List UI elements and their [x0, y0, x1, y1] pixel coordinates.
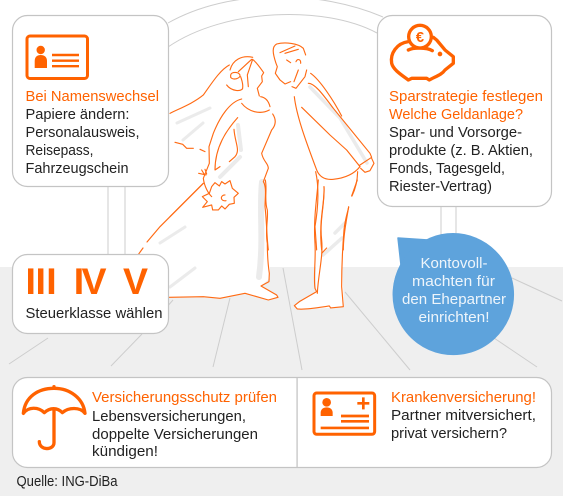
text block: Fonds, Tagesgeld,: [389, 161, 505, 177]
text block: Fahrzeugschein: [26, 161, 128, 177]
bouquet: [202, 181, 238, 210]
text block: Partner mitversichert,: [391, 408, 536, 424]
dress and shoes lower outline: [138, 180, 357, 309]
roman numerals: IIIIVV: [26, 260, 148, 302]
text block: Riester-Vertrag): [389, 179, 492, 195]
label: Steuerklasse wählen: [26, 306, 162, 322]
groom outline: [273, 43, 374, 250]
icon: umbrella: [23, 387, 85, 449]
background room lines: [9, 0, 562, 370]
text block: doppelte Versicherungen: [92, 427, 258, 443]
text block: Spar- und Vorsorge-: [389, 125, 522, 141]
text block: Reisepass,: [26, 143, 94, 159]
heading: Sparstrategie festlegen: [389, 89, 543, 105]
text block: [26, 107, 140, 177]
panel: bottom insurance: [12, 378, 552, 468]
callout: Kontovollmachten: [393, 233, 513, 354]
text block: Lebensversicherungen,: [92, 409, 246, 425]
white silhouette of dress and suit: [160, 262, 344, 309]
panel: Steuerklasse: [12, 254, 168, 334]
text block: kündigen!: [92, 444, 158, 460]
heading: Bei Namenswechsel: [26, 89, 159, 105]
text block: [391, 408, 536, 442]
icon: ID card: [27, 36, 88, 78]
heading: Welche Geldanlage?: [389, 107, 523, 123]
text block: Personalausweis,: [26, 125, 140, 141]
heading: [389, 89, 543, 123]
background floor: [0, 267, 563, 496]
text block: Papiere ändern:: [26, 107, 130, 123]
callout: Kontovollmachten: den Ehepartner: [402, 292, 506, 308]
soft shadows: [160, 87, 367, 287]
text block: produkte (z. B. Aktien,: [389, 143, 533, 159]
callout: Kontovollmachten: machten für: [412, 274, 495, 290]
bride upper outline: [170, 57, 275, 250]
text block: [389, 125, 533, 195]
panel: Namenswechsel: [12, 16, 168, 186]
heading: Versicherungsschutz prüfen: [92, 390, 277, 406]
callout: Kontovollmachten: einrichten!: [418, 310, 490, 326]
source: Quelle: ING-DiBa: [16, 474, 118, 490]
panel: Sparstrategie: [378, 16, 552, 206]
heading: Krankenversicherung!: [391, 390, 536, 406]
icon: piggy bank with euro coin: [391, 25, 453, 80]
text block: privat versichern?: [391, 426, 507, 442]
illustration: bride and groom: [138, 43, 374, 309]
callout: Kontovollmachten: Kontovoll-: [420, 256, 488, 272]
text block: [92, 409, 258, 460]
euro sign: €: [416, 30, 424, 46]
icon: health card: [314, 393, 375, 434]
